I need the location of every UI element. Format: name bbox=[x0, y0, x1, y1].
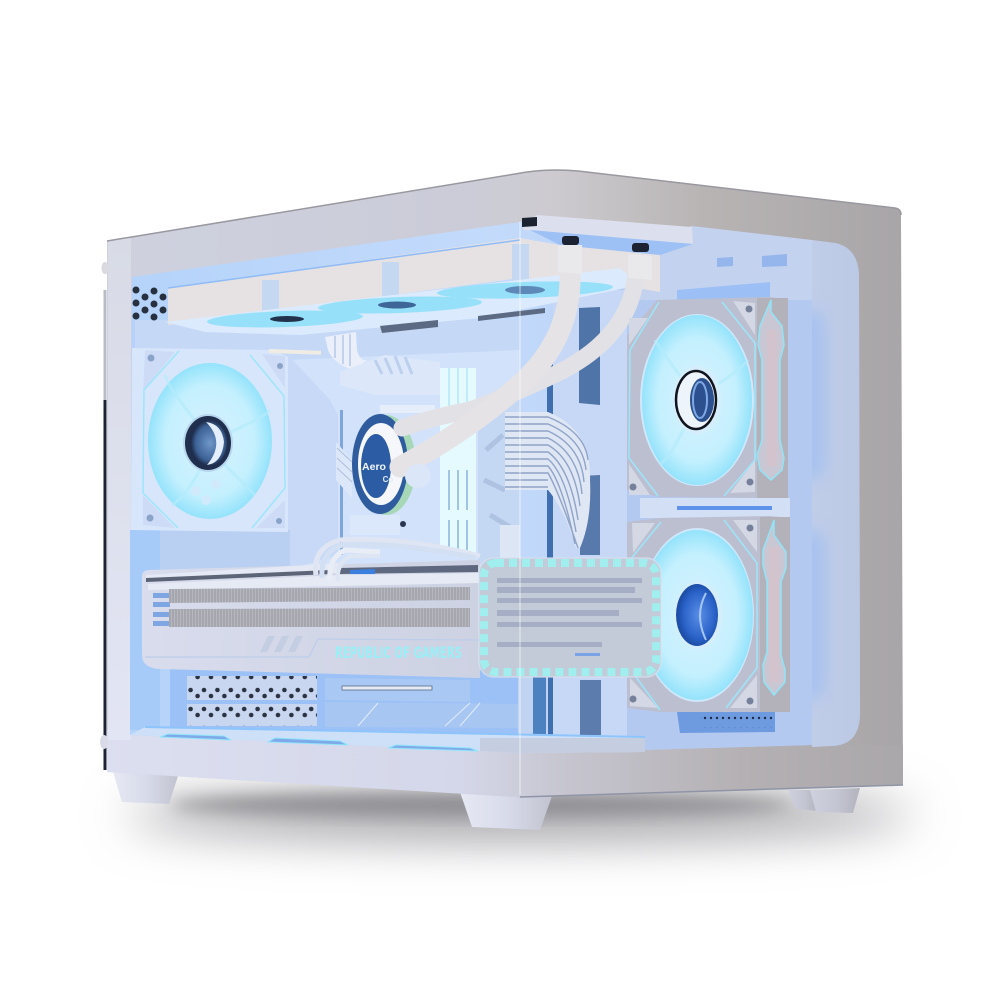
GPU RGB end plate bbox=[479, 558, 661, 677]
VRM heatsink bbox=[340, 355, 440, 413]
top fans bbox=[165, 268, 640, 335]
floor shadow bbox=[125, 791, 915, 839]
graphics card bbox=[142, 560, 480, 678]
GPU power cable bbox=[316, 539, 480, 581]
RAM modules bbox=[440, 368, 476, 553]
case body frame bbox=[100, 170, 903, 798]
CPU pump block: Aero bbox=[362, 462, 386, 473]
GPU branding text: REPUBLIC OF GAMERS bbox=[335, 643, 462, 662]
front glass corner edge bbox=[519, 222, 521, 795]
motherboard area bbox=[130, 320, 520, 730]
power cable bundle bbox=[505, 412, 590, 548]
pump outlet bbox=[405, 464, 431, 488]
lower slots and PCIe bbox=[170, 665, 548, 750]
interior opening bbox=[130, 222, 860, 753]
coolant tubes bbox=[400, 272, 636, 467]
right fan lower bbox=[627, 516, 790, 712]
right compartment back wall bbox=[547, 226, 812, 752]
tube fittings bbox=[558, 236, 652, 280]
top radiator bbox=[168, 215, 693, 325]
CPU pump block bbox=[352, 414, 416, 515]
top cable bundle bbox=[269, 332, 368, 370]
feet bbox=[113, 772, 860, 830]
CPU pump block: Co bbox=[383, 475, 393, 484]
side panel right bbox=[795, 240, 860, 747]
rear fan bbox=[131, 348, 288, 532]
right fan upper bbox=[627, 297, 788, 498]
rear vent honeycomb bbox=[132, 286, 166, 320]
bottom fan shelf bbox=[130, 727, 645, 753]
